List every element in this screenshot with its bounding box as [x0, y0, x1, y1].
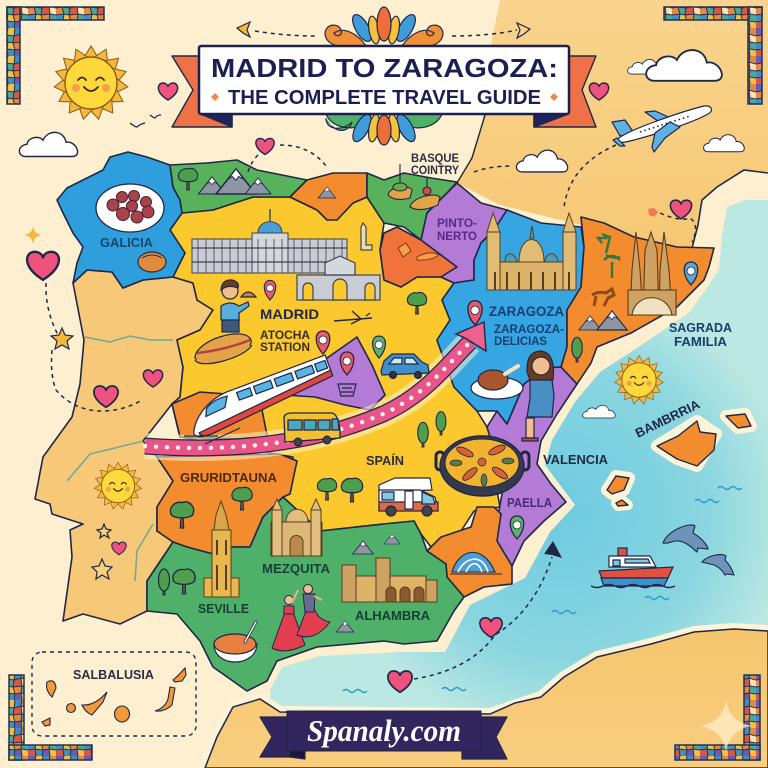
footer banner: Spanaly.com: [307, 713, 461, 748]
atocha label: [260, 330, 310, 354]
mosaic corner: bottom right: [675, 675, 760, 760]
region: portugal: [35, 270, 213, 624]
gazpacho bowl: [214, 622, 257, 662]
mosaic corner: top left: [7, 7, 104, 104]
pin: catalonia: [684, 262, 698, 285]
pinto-nerto label: NERTO: [437, 231, 477, 243]
icon: bread: [138, 252, 166, 272]
galicia label: GALICIA: [100, 235, 154, 250]
atocha label: ATOCHA: [260, 330, 310, 342]
region: catalonia: [561, 217, 714, 384]
mountains andalusia: [336, 534, 400, 632]
panel: spain map regions: [35, 152, 714, 691]
trees extremadura: [170, 487, 252, 528]
puerta de alcala: [297, 256, 380, 300]
arrowhead: [456, 322, 486, 351]
monument: [361, 223, 372, 250]
spain label: SPAÍN: [366, 453, 404, 468]
pinto-nerto label: PINTO-: [437, 218, 477, 230]
title: [199, 46, 569, 114]
bambrria label: BAMBRRIA: [633, 396, 703, 441]
icon: small plane: [334, 311, 372, 324]
land: north africa: [205, 629, 768, 768]
zaragoza label: ZARAGOZA: [489, 304, 564, 319]
hearts: [27, 83, 692, 692]
pin: zaragoza: [468, 301, 482, 325]
galicia plate: [96, 184, 164, 232]
dashed routes: [46, 30, 696, 679]
canary islands: [42, 668, 186, 726]
islands: balearic: [607, 414, 751, 506]
cantabria mountain: [318, 187, 336, 198]
trees andalusia: [158, 569, 195, 595]
mosaic corner: top right: [664, 7, 762, 104]
basque label: [411, 153, 459, 177]
zaragoza basilica: [487, 213, 576, 290]
madrid label: MADRID: [260, 306, 319, 322]
sagrada familia label: FAMILIA: [674, 335, 727, 349]
high speed train: [184, 355, 337, 440]
region: navarra: [421, 183, 507, 283]
region: asturias: [170, 160, 307, 213]
region: extremadura: [157, 454, 297, 554]
clouds: [19, 50, 744, 418]
sagrada familia label: [669, 321, 732, 349]
title: THE COMPLETE TRAVEL GUIDE: [228, 87, 541, 109]
airplane: [612, 106, 711, 152]
alhambra: [342, 558, 437, 602]
mosaic corner: bottom left: [9, 675, 92, 760]
region: small orange: [172, 392, 268, 440]
dolphin large: [663, 525, 708, 552]
purple region pin with icon: [338, 352, 356, 396]
sagrada familia: [628, 232, 676, 315]
region: galicia: [57, 152, 185, 288]
valencia label: VALENCIA: [543, 452, 609, 467]
region: rioja: [380, 227, 457, 287]
zaragoza delicias label: ZARAGOZA-: [494, 324, 564, 336]
paella label: PAELLA: [507, 496, 552, 510]
region: central purple: [285, 337, 385, 410]
oceanographic: [450, 552, 502, 574]
asturias scene: [178, 168, 271, 194]
zaragoza delicias label: DELICIAS: [494, 336, 547, 348]
icon: bocadillo: [195, 334, 252, 364]
icon: sun sea: [614, 356, 664, 405]
madrid man with tray: [221, 280, 256, 332]
mezquita label: MEZQUITA: [262, 561, 331, 576]
pin: paella: [510, 516, 524, 539]
ribbon: left: [172, 56, 232, 127]
royal palace: [192, 209, 347, 273]
region: cantabria: [290, 173, 367, 220]
rivers: [67, 336, 173, 581]
rioja details: [398, 243, 439, 260]
atocha label: STATION: [260, 342, 310, 354]
small orange mark: [648, 208, 658, 217]
region: castilla yellow: [170, 197, 500, 547]
ribbon: right: [534, 56, 596, 127]
sea: [270, 200, 768, 768]
dolphin small: [702, 555, 734, 575]
title ornaments: [325, 7, 443, 145]
basque label: BASQUE: [411, 153, 459, 165]
paella pan: [436, 436, 529, 496]
region: valencia purple: [487, 367, 577, 566]
green pin: [373, 336, 385, 358]
pinto-nerto label: [437, 218, 477, 243]
sea life: [663, 525, 734, 575]
icon: sun portugal: [94, 462, 142, 510]
region: basque: [367, 173, 457, 240]
boat: [591, 548, 675, 588]
sagrada familia label: SAGRADA: [669, 321, 732, 335]
banner tails: [260, 717, 507, 759]
extremadura label: GRURIDTAUNA: [180, 470, 278, 485]
seville label: SEVILLE: [198, 601, 249, 616]
trees center: [317, 478, 363, 502]
pin: madrid: [264, 280, 276, 300]
blue car: [381, 354, 429, 378]
camper van: [379, 478, 438, 516]
pin: atocha: [316, 331, 330, 354]
mezquita building: [271, 499, 322, 556]
plate with ham: [471, 366, 523, 399]
waves: [343, 486, 742, 692]
icon: sun top left: [53, 46, 129, 121]
catalonia scene: [572, 235, 627, 362]
flamenco dancers: [272, 584, 330, 651]
region: aragon: [437, 210, 584, 424]
canary label: SALBALUSIA: [73, 668, 154, 682]
woman cooking: [522, 351, 554, 441]
cypress trees: [418, 412, 446, 447]
arrow glow and route: [145, 342, 470, 448]
tapas: [388, 164, 440, 210]
giralda tower: [204, 501, 239, 597]
title: MADRID TO ZARAGOZA:: [211, 53, 558, 83]
zaragoza delicias label: [494, 324, 564, 348]
tree: [407, 292, 427, 314]
region: andalusia: [147, 497, 464, 691]
rails: [184, 428, 240, 444]
basque label: COINTRY: [411, 165, 459, 177]
land: france: [457, 0, 768, 250]
panel: canary islands inset: [32, 652, 196, 736]
region: murcia: [427, 507, 512, 597]
yellow bus: [284, 413, 340, 446]
alhambra label: ALHAMBRA: [355, 608, 431, 623]
